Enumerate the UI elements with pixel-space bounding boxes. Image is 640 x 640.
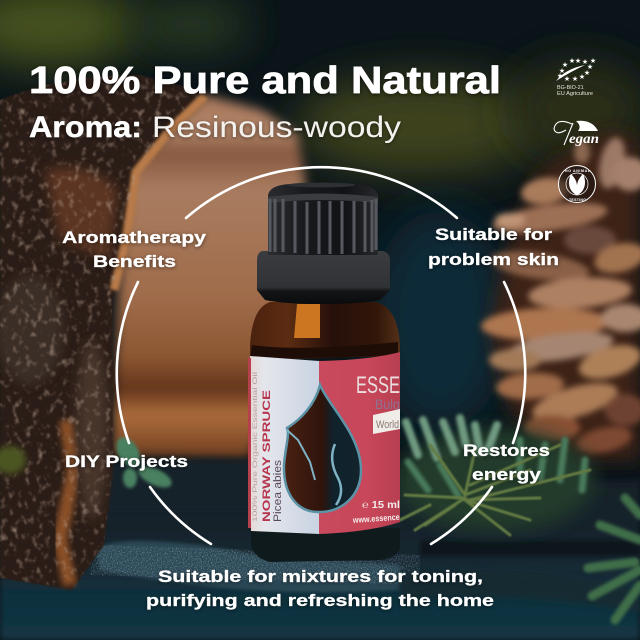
callout: DIY projects: DIY Projects (65, 453, 188, 471)
icon: no animal testing: TESTING (569, 198, 586, 202)
callout: mixtures: purifying and refreshing the home (146, 592, 494, 610)
icon: EU organic: ★ (569, 57, 575, 65)
subtitle: aroma: Resinous-woody (152, 111, 401, 144)
label: brand text: World (376, 419, 399, 431)
callout: problem skin (428, 226, 559, 269)
dropper insert (294, 304, 320, 338)
background: pine cone (480, 130, 640, 460)
title: 100% Pure and Natural (29, 60, 501, 102)
label: white panel (250, 356, 319, 534)
icon: EU organic: ★ (559, 67, 565, 75)
label: brand text: ℮ 15 ml (362, 500, 400, 511)
background: cloth surface (0, 460, 640, 640)
callout: aromatherapy benefits (62, 229, 207, 271)
arc: left (117, 282, 138, 443)
callout: restores energy: Restores (463, 442, 550, 460)
icon: EU organic: ★ (587, 63, 593, 71)
label: vertical product name: Picea abies (272, 459, 284, 522)
callout: restores energy (463, 442, 550, 484)
bottle glass shoulder (250, 302, 400, 360)
icon: EU organic: ★ (584, 69, 590, 77)
icon: EU organic: ★ (564, 75, 570, 83)
icon: EU organic: ★ (575, 57, 581, 65)
callout: aromatherapy benefits: Benefits (93, 253, 176, 271)
label: brand text: ESSE (356, 372, 400, 399)
icon: EU organic: ★ (562, 61, 568, 69)
subtitle: aroma (29, 111, 401, 144)
label: brand text (352, 372, 400, 525)
arc: right (504, 282, 525, 443)
icon: no animal testing (558, 166, 596, 202)
label: vertical product name (253, 372, 284, 522)
dropper collar (257, 251, 390, 304)
label: brand text: Bulg (375, 396, 400, 412)
subtitle: aroma: Aroma: (29, 111, 142, 144)
label: brand text: www.essence (352, 512, 400, 525)
icon: EU organic: ★ (557, 72, 563, 80)
icon: EU organic: BG-BIO-21 (557, 85, 584, 91)
callout: restores energy: energy (472, 466, 542, 484)
icon: EU organic: ★ (579, 73, 585, 81)
ribbed cap (268, 182, 378, 255)
arc: top (186, 167, 457, 218)
icon: EU organic: ★ (572, 75, 578, 83)
bottle (248, 182, 400, 562)
icon: vegan: egan (569, 132, 599, 147)
arc: lower left (150, 487, 211, 544)
background: fir branch (395, 418, 640, 620)
icon: EU organic: ★ (582, 58, 588, 66)
background: bark log (0, 75, 205, 590)
callout: problem skin: problem skin (428, 251, 559, 269)
callout: aromatherapy benefits: Aromatherapy (62, 229, 207, 247)
callout: mixtures (146, 568, 494, 610)
label: drop emblem (284, 385, 361, 512)
icon: vegan (554, 121, 599, 147)
background: wood slab (112, 95, 305, 458)
circular arc frame (117, 167, 525, 544)
label: vertical product name: 100% Pure Organic Essential Oil (253, 372, 259, 522)
icon: no animal testing: NO ANIMAL (565, 169, 591, 173)
background: top foliage blur (0, 0, 640, 430)
arc: lower right (431, 487, 492, 544)
label: vertical product name: NORWAY SPRUCE (261, 390, 273, 522)
label: red panel (319, 352, 400, 534)
callout: mixtures: Suitable for mixtures for toning, (158, 568, 483, 586)
icon: EU organic (556, 57, 596, 97)
callout: problem skin: Suitable for (435, 226, 553, 244)
icon: EU organic: EU Agriculture (557, 91, 593, 97)
icon: EU organic: ★ (590, 57, 596, 65)
background: small blurred sprig (114, 436, 174, 490)
bottle base (251, 528, 400, 562)
